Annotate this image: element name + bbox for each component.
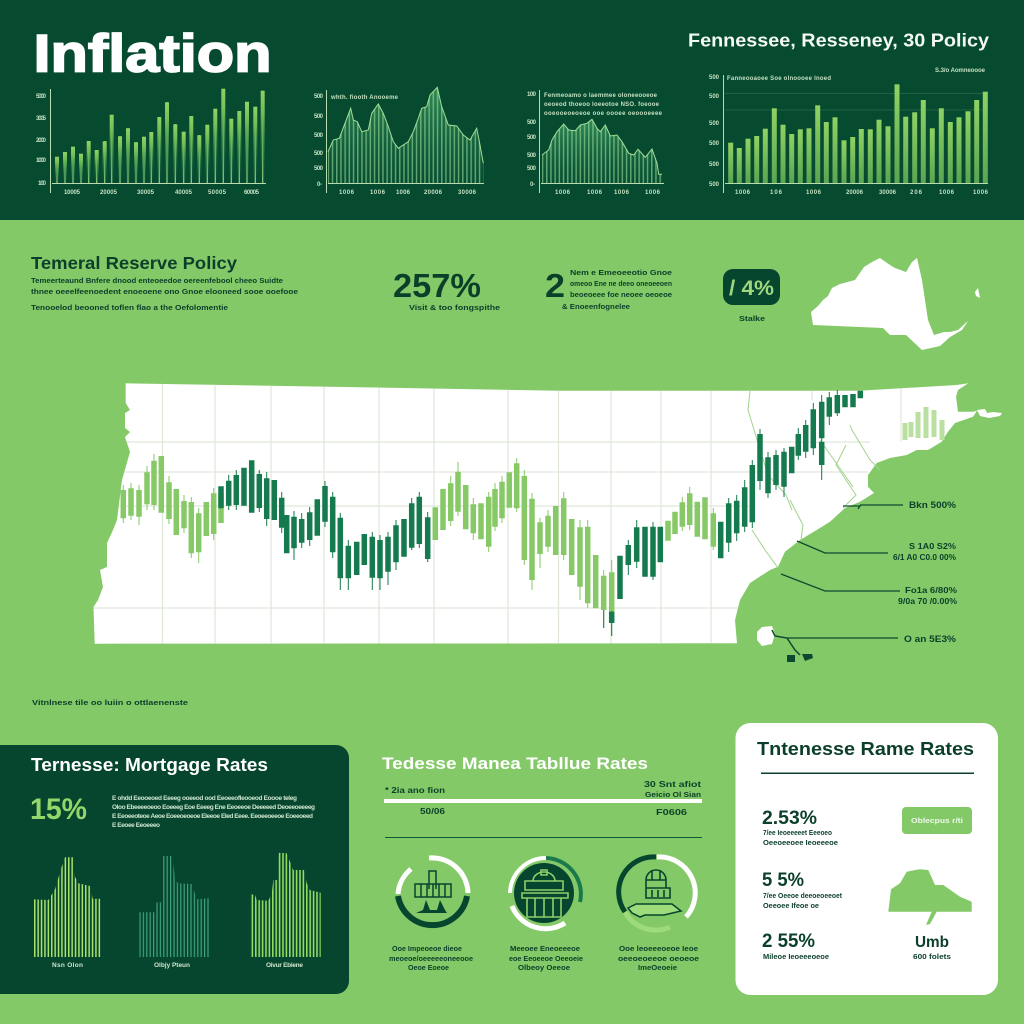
- stat one: [762, 808, 838, 847]
- callouts: map leader lines and values: Bkn 500%: [909, 500, 956, 510]
- mini chart A: [33, 857, 102, 957]
- chart: header bars four: 20006: [846, 190, 864, 196]
- icon: bank ring one: [398, 858, 468, 925]
- chart: header area three: 0-: [530, 182, 535, 188]
- card badge: [902, 807, 972, 834]
- icon: bank ring two: [510, 858, 581, 929]
- chart: header bars one: [36, 89, 266, 196]
- stat: figure two with note: Nem e Emeoeeotio Gnoe: [570, 268, 672, 277]
- chart: header bars one: 3005: [36, 116, 47, 122]
- chart: header area three: 100: [527, 92, 537, 98]
- mortgage text: Oloo Ebeeeeoeoo Eoeeeg Eoe Eeeeg Ene Eeoeeoe Deeeeed Deoeeoeeeeg: [112, 804, 315, 811]
- chart: header area two: 500: [314, 166, 324, 172]
- stat one: Oeeoeeoee Ieoeeeoe: [763, 838, 838, 847]
- card map label: [913, 934, 951, 961]
- icon captions: Olbeoy Oeeoe: [518, 963, 570, 972]
- mortgage text: E Eeoee Eeoeeeo: [112, 822, 160, 829]
- icon captions: Oeoe Eoeoe: [408, 963, 449, 972]
- badge: 4 percent: Stalke: [739, 314, 765, 323]
- chart: header bars four: 1006: [973, 190, 989, 196]
- mini chart labels: Olbjy Pteun: [154, 962, 190, 969]
- island and marker: [757, 626, 813, 662]
- badge: 4 percent: [723, 269, 780, 323]
- icon: card state map: [888, 869, 972, 925]
- stat two: Oeeoee Ifeoe oe: [763, 901, 819, 910]
- chart: header bars four: 500: [709, 182, 720, 188]
- chart: header bars one: 10005: [64, 190, 81, 196]
- stat three: [762, 931, 829, 961]
- chart: header area three: 1006: [614, 190, 630, 196]
- mortgage stat: 15%: [30, 793, 87, 826]
- stat: figure two with note: [545, 267, 672, 311]
- chart: header bars four: 30006: [879, 190, 897, 196]
- chart: header area two: 500: [314, 133, 324, 139]
- text block: federal reserve policy: thnee oeeelfeenoedent enoeoene ono Gnoe elooneed sooe ooefooe: [31, 287, 298, 296]
- table rows: Geicio Ol Sian: [645, 790, 701, 799]
- header subtitle: Fennessee, Resseney, 30 Policy: [688, 30, 990, 50]
- chart: header bars four: 1006: [806, 190, 822, 196]
- chart: header bars four: 206: [910, 190, 923, 196]
- title: Inflation: [34, 24, 272, 84]
- stat: figure two with note: beoeoeee foe neoee oeoeoe: [570, 290, 672, 299]
- chart: header bars one: 100: [38, 181, 47, 187]
- callouts: map leader lines and values: Fo1a 6/80%: [905, 585, 957, 595]
- chart: header area two: 20006: [424, 190, 443, 196]
- callouts: map leader lines and values: [781, 500, 957, 644]
- chart: header area two: 500: [314, 151, 324, 157]
- chart: header bars one: 60005: [244, 190, 260, 196]
- stat: 257 percent: Visit & too fongspithe: [409, 303, 500, 312]
- chart: header area three: 1006: [555, 190, 571, 196]
- chart: header bars one: 20005: [100, 190, 118, 196]
- chart: header bars one: 40005: [175, 190, 193, 196]
- chart: header bars one: 1000: [36, 158, 47, 164]
- chart: header bars one: 50005: [208, 190, 227, 196]
- icon: bank ring three: [619, 857, 695, 930]
- chart: header area two: 1006: [370, 190, 386, 196]
- table rows: [384, 779, 702, 838]
- mortgage text: E ohdd Eeooeoed Eeeeg ooeeod ood Eeoeeofleooeod Eoooe teleg: [112, 795, 297, 802]
- panel: mortgage rates: [0, 745, 349, 994]
- chart: header area three: 500: [527, 135, 537, 141]
- chart: header bars four: 1006: [735, 190, 751, 196]
- icon captions: eoe Eeoeeoe Oeeoeie: [509, 954, 583, 963]
- stat: 257 percent: [393, 267, 500, 312]
- table rows: F0606: [656, 807, 687, 817]
- stat: figure two with note: 2: [545, 267, 565, 304]
- chart: header area three: 1006: [645, 190, 661, 196]
- icon captions: oeeoeoeeoe oeoeoe: [618, 954, 699, 963]
- panel: rate summary card: [736, 723, 998, 995]
- chart: header area three: 1006: [587, 190, 603, 196]
- panel: header band: [0, 0, 1024, 220]
- chart: header area three: 500: [527, 153, 537, 159]
- chart: header bars four: 500: [709, 121, 720, 127]
- chart: header bars one: 5000: [36, 94, 47, 100]
- text block: federal reserve policy: Temeral Reserve Policy: [31, 253, 237, 273]
- candles: light green wicks and bodies: [123, 454, 713, 636]
- chart: header area three: oeoeod thoeoo loeeotoe NSO. foeooe: [544, 102, 660, 108]
- text block: federal reserve policy: [31, 253, 298, 312]
- chart: header bars one: 2000: [36, 138, 47, 144]
- chart: header bars four: 500: [709, 162, 720, 168]
- chart: header area two: 1006: [396, 190, 411, 196]
- stat two: 5 5%: [762, 870, 804, 891]
- card badge: Oblecpus r/ti: [911, 816, 963, 825]
- stat two: 7/ee Oeeoe deeoeoeeoet: [763, 891, 842, 900]
- chart: header area three: 500: [527, 166, 537, 172]
- icon captions: Meeoee Eneoeeeoe: [510, 944, 580, 953]
- table heading: Tedesse Manea Tabllue Rates: [382, 754, 648, 773]
- callouts: map leader lines and values: 6/1 A0 C0.0 00%: [893, 552, 956, 562]
- chart: header area three: 500: [527, 120, 537, 126]
- stat: figure two with note: & Enoeenfognelee: [562, 302, 630, 311]
- stat two: [762, 870, 842, 910]
- chart: header bars four: S.3/o Aomneoooe: [935, 68, 986, 74]
- chart: header bars four: 500: [709, 141, 720, 147]
- chart: header area two: [314, 87, 484, 196]
- card map label: Umb: [915, 934, 949, 951]
- chart: header bars four: 1006: [939, 190, 955, 196]
- chart: header area three: [527, 90, 664, 196]
- icon captions: Ooe leoeeeoeoe Ieoe: [619, 944, 698, 953]
- map: candlestick chart on state outline: [90, 380, 1002, 662]
- chart: header area two: 500: [314, 94, 324, 100]
- chart: header area two: 1006: [339, 190, 355, 196]
- icon captions: [389, 944, 699, 972]
- chart: header area two: whth. fiooth Anooeme: [330, 95, 399, 101]
- chart: header area two: 30006: [458, 190, 477, 196]
- mini chart labels: [52, 962, 303, 969]
- mortgage text: [112, 795, 315, 829]
- chart: header bars four: 106: [770, 190, 783, 196]
- icon captions: ImeOeoeie: [638, 963, 677, 972]
- candles: dark green wicks and bodies: [221, 390, 860, 636]
- table rows: 50/06: [420, 806, 445, 816]
- mini chart labels: Nsn Olon: [52, 962, 83, 969]
- chart: header area three: ooeooeoeoeoe ooe oooee oeoooeeee: [544, 111, 663, 117]
- text block: federal reserve policy: Temeerteaund Bnfere dnood enteoeedoe oereenfebool cheeo Suidte: [31, 276, 283, 285]
- card map label: 600 folets: [913, 952, 951, 961]
- chart: header bars four: 500: [709, 94, 720, 100]
- badge: 4 percent: / 4%: [729, 277, 774, 300]
- callouts: map leader lines and values: O an 5E3%: [904, 634, 956, 644]
- callouts: map leader lines and values: 9/0a 70 /0.00%: [898, 596, 957, 606]
- chart: header area two: 0-: [317, 182, 322, 188]
- stat: 257 percent: 257%: [393, 267, 481, 304]
- mortgage text: E Eeoeeoteoe Aeoe Eoeeoeoeoe Eleeoe Eled Eeee. Eeoeeoeeoe Eoeeoeed: [112, 813, 313, 820]
- icon captions: meoeoe/oeeeeeoneeooe: [389, 954, 473, 963]
- table rows: 30 Snt afiot: [644, 779, 701, 789]
- mortgage heading: Ternesse: Mortgage Rates: [31, 755, 268, 775]
- stat one: 7/ee Ieoeeeeet Eeeoeo: [763, 828, 832, 837]
- callouts: map leader lines and values: S 1A0 S2%: [909, 541, 956, 551]
- stat three: Mileoe Ieoeeeoeoe: [763, 952, 829, 961]
- icon captions: Ooe Impeoeoe dieoe: [392, 944, 462, 953]
- panel: table rates: [382, 754, 702, 972]
- card heading: Tntenesse Rame Rates: [757, 739, 974, 759]
- chart: header area three: Fenmeoamo o laemmee oloneeooeoe: [544, 93, 658, 99]
- chart: header bars four: [709, 68, 989, 196]
- chart: header area two: 500: [314, 114, 324, 120]
- stat: figure two with note: omeoo Ene ne deeo oneoeeoen: [570, 279, 672, 288]
- stat one: 2.53%: [762, 808, 817, 829]
- mini chart labels: Oivur Ebiene: [266, 962, 303, 969]
- footnote: Vitnlnese tile oo luiin o ottlaenenste: [32, 698, 188, 707]
- text block: federal reserve policy: Tenooelod beooned toflen flao a the Oefolomentie: [31, 303, 228, 312]
- chart: header bars one: 30005: [137, 190, 155, 196]
- chart: header bars four: Fanneooaoee Soe olnoooee lnoed: [727, 76, 831, 82]
- chart: header bars four: 500: [709, 75, 720, 81]
- mini chart C: [250, 853, 321, 957]
- map: small state outline: [811, 258, 980, 350]
- mini chart B: [139, 856, 209, 957]
- table rows: * 2ia ano fion: [385, 785, 445, 795]
- stat three: 2 55%: [762, 931, 815, 952]
